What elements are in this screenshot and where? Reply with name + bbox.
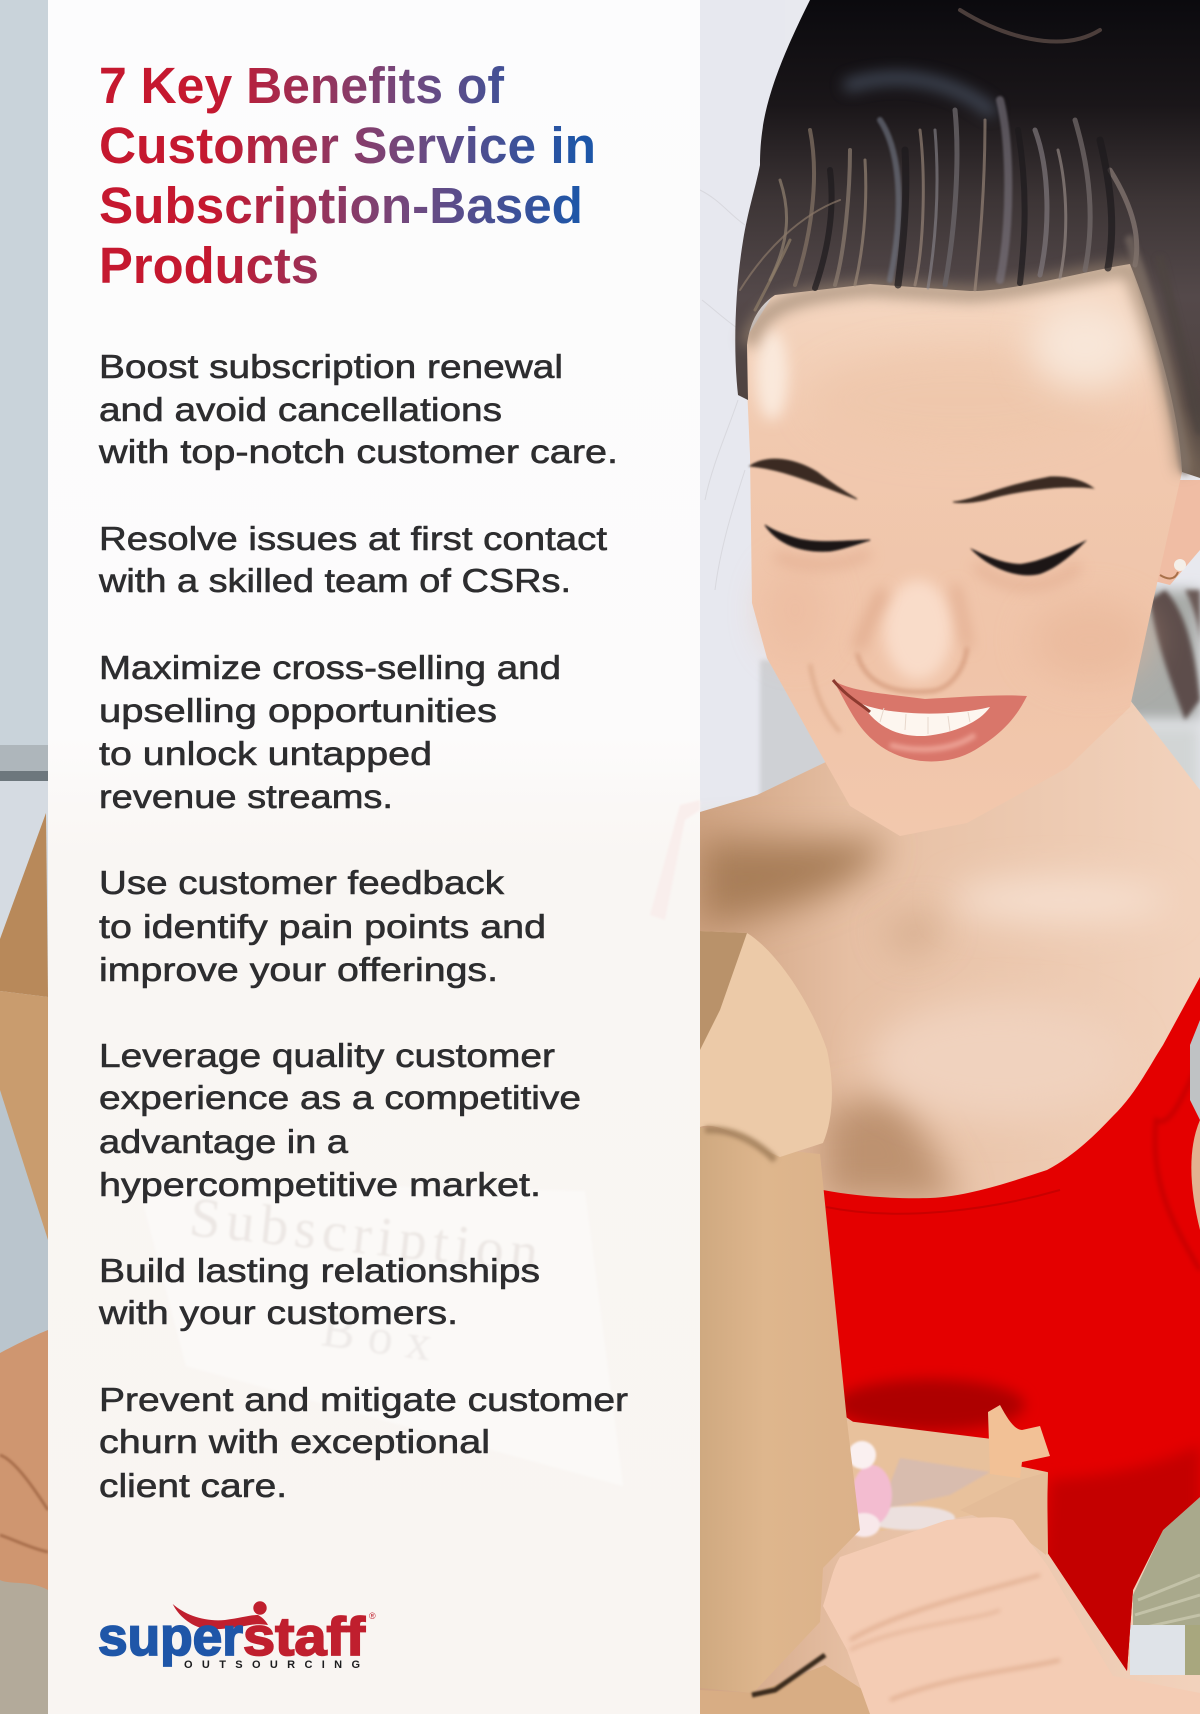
benefit 1	[98, 348, 618, 470]
hairline transition	[748, 268, 1184, 472]
benefit 1: with top-notch customer care.	[98, 433, 618, 470]
benefit 3: to unlock untapped	[99, 735, 432, 772]
benefit 7: Prevent and mitigate customer	[99, 1381, 628, 1418]
white translucent text panel	[48, 0, 700, 1714]
logo wordmark blue: super	[98, 1607, 243, 1667]
benefit 6: Build lasting relationships	[99, 1252, 540, 1289]
benefit 4	[99, 864, 546, 988]
benefit 5: hypercompetitive market.	[99, 1166, 541, 1203]
photo: hair strands behind ear	[1150, 590, 1200, 720]
logo swoosh	[173, 1604, 268, 1629]
photo: open subscription box contents	[847, 1405, 1050, 1555]
photo: right hand	[823, 1517, 1200, 1714]
photo: cardboard box held at left edge	[0, 813, 48, 1240]
photo: face	[745, 262, 1182, 836]
photo: ear and earring	[1150, 480, 1200, 585]
benefit 7: client care.	[99, 1467, 287, 1504]
benefit 2	[98, 520, 607, 599]
faint strap behind panel	[650, 800, 700, 920]
benefit 4: improve your offerings.	[99, 951, 498, 988]
benefit 6	[98, 1252, 540, 1331]
photo: hair and bun	[735, 0, 1200, 478]
tape flap	[988, 1405, 1050, 1478]
benefit 7	[99, 1381, 628, 1504]
benefit 5: Leverage quality customer	[99, 1037, 555, 1074]
logo: SuperStaff Outsourcing	[98, 1601, 376, 1671]
benefit 3: Maximize cross-selling and	[99, 649, 561, 686]
photo: red tank top	[823, 977, 1200, 1700]
faint subscription card behind panel: Subscription	[187, 1186, 541, 1285]
benefit 7: churn with exceptional	[99, 1423, 490, 1460]
benefit 2: Resolve issues at first contact	[99, 520, 607, 557]
benefit 1: Boost subscription renewal	[99, 348, 563, 385]
benefit 5: experience as a competitive	[99, 1079, 581, 1116]
logo wordmark red: staff	[243, 1607, 366, 1667]
photo: left hand fragment	[0, 1330, 48, 1590]
title: Products	[99, 237, 319, 294]
under-eye shadow	[775, 552, 1080, 586]
eyes	[765, 525, 1087, 575]
benefit 5	[99, 1037, 581, 1203]
benefit 3: revenue streams.	[99, 778, 393, 815]
faint subscription card behind panel	[137, 1180, 623, 1486]
benefit 3	[99, 649, 561, 815]
faint subscription card behind panel: Box	[318, 1300, 435, 1371]
benefit 6: with your customers.	[98, 1294, 458, 1331]
title: 7 Key Benefits of	[99, 57, 505, 114]
title	[99, 57, 596, 294]
logo registered mark: ®	[369, 1611, 376, 1621]
benefit 2: with a skilled team of CSRs.	[98, 562, 571, 599]
title: Subscription-Based	[99, 177, 583, 234]
logo dot	[253, 1601, 267, 1615]
photo: kraft box flap and body	[700, 931, 900, 1714]
benefit 4: to identify pain points and	[99, 908, 546, 945]
eyebrows	[750, 459, 1093, 503]
smile crease	[810, 664, 840, 732]
hair highlights	[740, 10, 1200, 470]
logo tagline: OUTSOURCING	[184, 1659, 360, 1671]
benefit 4: Use customer feedback	[99, 864, 505, 901]
tissue flower	[848, 1441, 892, 1537]
benefit 1: and avoid cancellations	[99, 391, 502, 428]
nose	[857, 580, 968, 692]
photo: neck and chest	[700, 700, 1200, 1714]
benefit 3: upselling opportunities	[99, 692, 497, 729]
stray hair wisps	[700, 190, 745, 590]
benefit 5: advantage in a	[99, 1123, 349, 1160]
photo: window blinds and shelf at right	[1130, 1497, 1200, 1675]
mouth	[833, 680, 1027, 761]
title: Customer Service in	[99, 117, 596, 174]
